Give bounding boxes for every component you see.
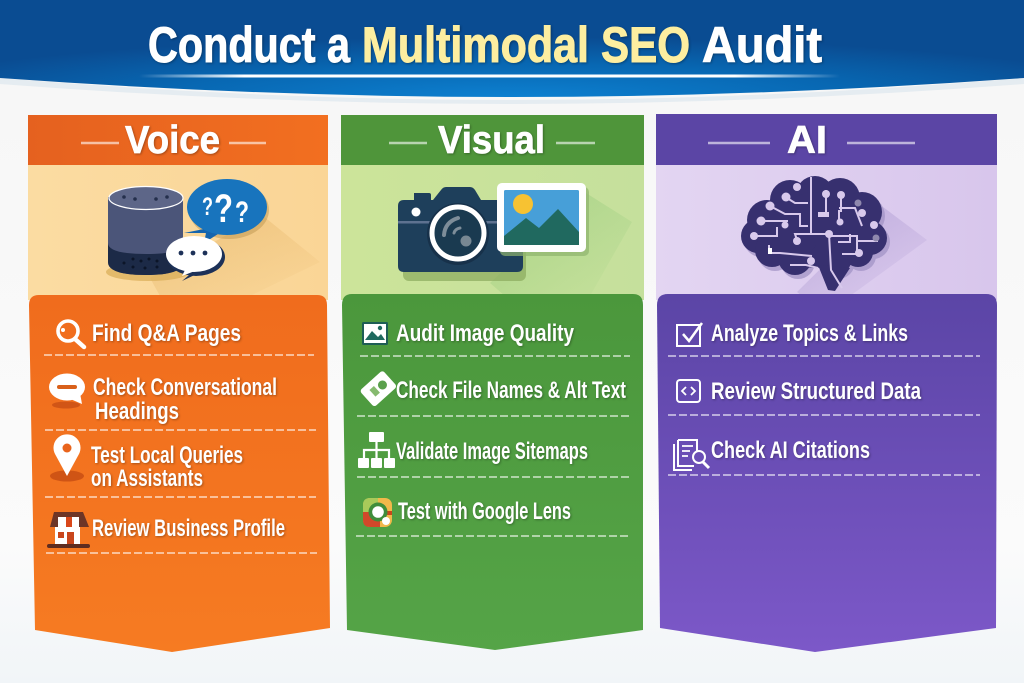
heading: Visual	[341, 115, 644, 165]
item: Review Structured Data: Review Structured Data	[711, 378, 922, 405]
icon: camera and picture	[398, 183, 589, 281]
item: Test with Google Lens	[363, 498, 571, 527]
item: Find Q&A Pages	[58, 320, 241, 347]
item: Audit Image Quality: Audit Image Quality	[396, 320, 575, 347]
panel: AI	[656, 114, 997, 652]
item: Test Local Queries on Assistants: on Assistants	[91, 465, 203, 492]
item: Audit Image Quality	[362, 320, 575, 347]
item: Test with Google Lens: Test with Google Lens	[398, 498, 571, 525]
panel: Voice	[28, 115, 330, 652]
item: Review Business Profile	[47, 512, 285, 548]
item: Validate Image Sitemaps: Validate Image Sitemaps	[396, 438, 588, 465]
item: Check AI Citations	[674, 437, 870, 470]
icon: smart speaker with speech bubbles: ?	[235, 196, 249, 229]
item: Validate Image Sitemaps	[358, 432, 588, 468]
title: Multimodal	[362, 17, 589, 73]
title	[148, 17, 822, 73]
icon: smart speaker with speech bubbles: ?	[214, 187, 233, 231]
item: Test Local Queries on Assistants	[50, 434, 243, 492]
list panel: Visual	[342, 294, 643, 650]
item: Check AI Citations: Check AI Citations	[711, 437, 870, 464]
icon: smart speaker with speech bubbles: ?	[202, 193, 213, 221]
title: SEO	[601, 17, 690, 73]
item: Review Business Profile: Review Business Profile	[92, 515, 285, 542]
list panel: AI	[657, 294, 997, 652]
title: Audit	[702, 17, 822, 73]
list panel: Voice	[29, 295, 330, 652]
icon: smart speaker with speech bubbles	[106, 179, 269, 281]
panel: Visual	[341, 115, 644, 650]
item: Check File Names & Alt Text: Check File Names & Alt Text	[396, 377, 626, 404]
heading: AI: AI	[787, 119, 827, 162]
header banner	[0, 0, 1024, 104]
heading: AI	[656, 114, 997, 165]
item: Test Local Queries on Assistants: Test Local Queries	[91, 442, 243, 469]
heading: Visual: Visual	[438, 119, 545, 162]
icon: circuit brain	[741, 176, 890, 291]
heading: Voice	[28, 115, 328, 165]
item: Check Conversational Headings: Check Conversational	[93, 374, 277, 401]
item: Review Structured Data	[677, 378, 922, 405]
heading: Voice: Voice	[125, 119, 220, 162]
item: Check Conversational Headings: Headings	[95, 398, 179, 425]
item: Find Q&A Pages: Find Q&A Pages	[92, 320, 241, 347]
item: Check Conversational Headings	[49, 374, 277, 425]
item: Analyze Topics & Links	[677, 320, 908, 347]
title: Conduct a	[148, 17, 351, 73]
item: Check File Names & Alt Text	[359, 370, 626, 407]
item: Analyze Topics & Links: Analyze Topics & Links	[711, 320, 908, 347]
